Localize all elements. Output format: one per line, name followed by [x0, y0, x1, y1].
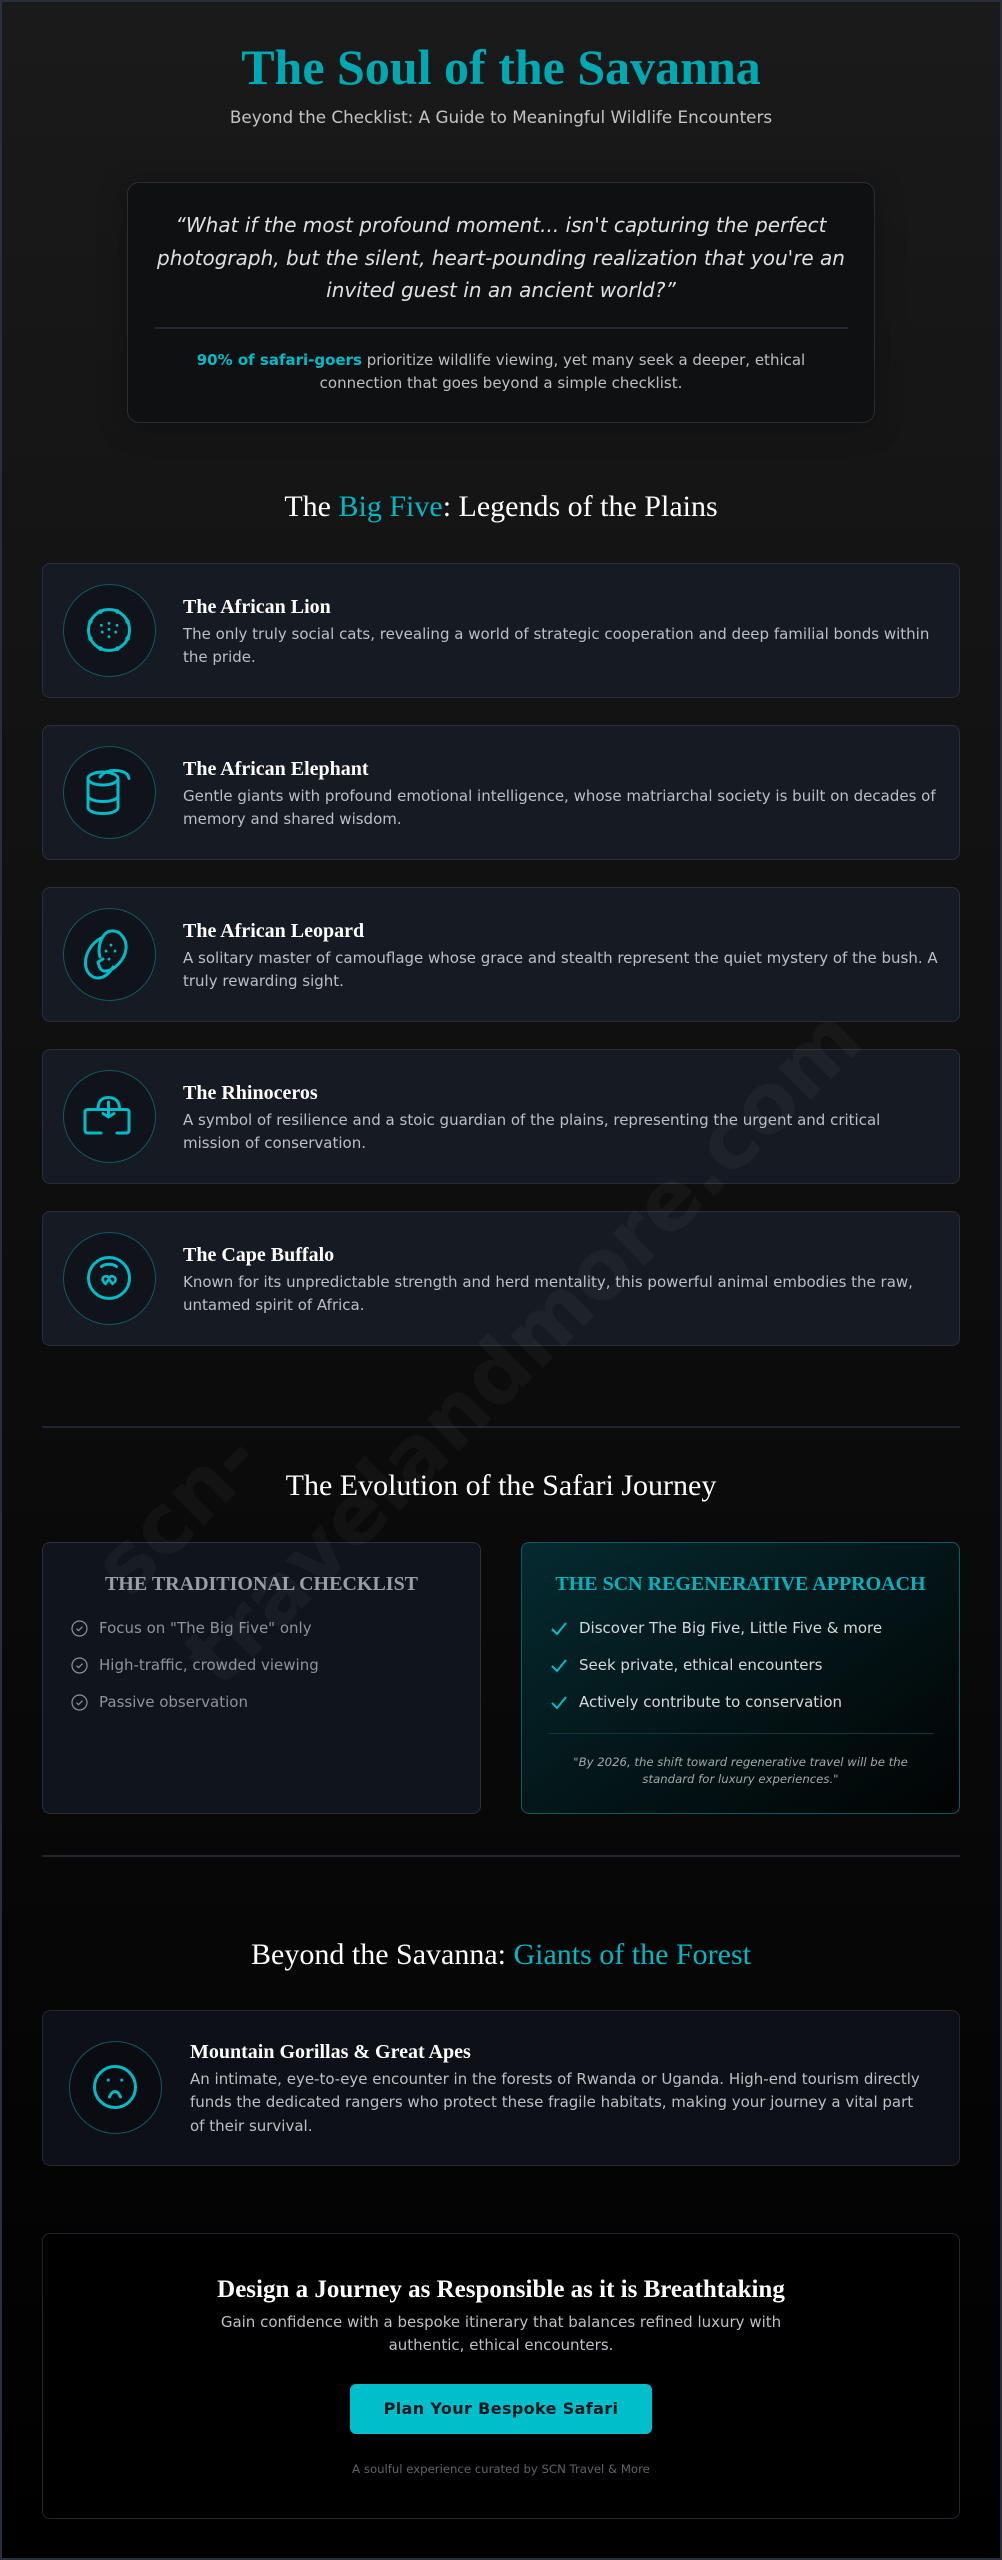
- description: A symbol of resilience and a stoic guardian of the plains, representing the urgent and critical: [183, 1111, 880, 1129]
- description: [183, 949, 938, 990]
- icon: lion: [63, 584, 156, 677]
- name: The African Lion: [183, 596, 331, 618]
- panel: opening quote: [127, 182, 875, 423]
- icon: gorilla: [69, 2041, 162, 2134]
- quote text: invited guest in an ancient world?”: [326, 278, 676, 302]
- forecast note: [573, 1755, 908, 1786]
- description: funds the dedicated rangers who protect these fragile habitats, making your journey a vital part: [190, 2093, 913, 2111]
- description: of their survival.: [190, 2117, 312, 2135]
- name: The African Leopard: [183, 920, 364, 942]
- heading: evolution: The Evolution of the Safari Journey: [286, 1469, 716, 1502]
- list item: Focus on "The Big Five" only: [99, 1619, 312, 1637]
- watermark: scn-: [75, 1410, 279, 1614]
- quote text: [157, 213, 845, 302]
- description: truly rewarding sight.: [183, 972, 344, 990]
- subtitle: Beyond the Checklist: A Guide to Meaningful Wildlife Encounters: [230, 107, 772, 127]
- icon: leopard: [63, 908, 156, 1001]
- list item: Discover The Big Five, Little Five & more: [579, 1619, 882, 1637]
- list item: High-traffic, crowded viewing: [99, 1656, 319, 1674]
- cta heading: Design a Journey as Responsible as it is Breathtaking: [217, 2276, 785, 2303]
- heading: beyond the savanna: Beyond the Savanna: Giants of the Forest: [251, 1938, 751, 1971]
- card: buffalo: [42, 1211, 960, 1346]
- description: memory and shared wisdom.: [183, 810, 402, 828]
- quote text: “What if the most profound moment... isn't capturing the perfect: [176, 213, 826, 237]
- button: [350, 2384, 652, 2434]
- statistic: [197, 351, 805, 392]
- panel: traditional checklist: [42, 1542, 481, 1814]
- icon: elephant: [63, 746, 156, 839]
- icon: rhinoceros: [63, 1070, 156, 1163]
- description: [183, 787, 936, 828]
- card: elephant: [42, 725, 960, 860]
- quote text: photograph, but the silent, heart-pounding realization that you're an: [157, 246, 845, 270]
- description: mission of conservation.: [183, 1134, 366, 1152]
- cta text: Gain confidence with a bespoke itinerary that balances refined luxury with: [221, 2313, 781, 2331]
- description: [183, 1273, 913, 1314]
- title: The Soul of the Savanna: [241, 39, 761, 95]
- panel: call to action: [42, 2233, 960, 2519]
- button: Plan Your Bespoke Safari: [384, 2399, 618, 2418]
- footer credit: A soulful experience curated by SCN Travel & More: [352, 2462, 650, 2476]
- name: The Rhinoceros: [183, 1082, 318, 1104]
- panel heading: THE SCN REGENERATIVE APPROACH: [555, 1573, 926, 1595]
- list item: Seek private, ethical encounters: [579, 1656, 822, 1674]
- cta text: authentic, ethical encounters.: [389, 2336, 613, 2354]
- card: leopard: [42, 887, 960, 1022]
- card: rhinoceros: [42, 1049, 960, 1184]
- panel: regenerative approach: [521, 1542, 960, 1814]
- description: Known for its unpredictable strength and herd mentality, this powerful animal embodies the raw,: [183, 1273, 913, 1291]
- list item: Passive observation: [99, 1693, 248, 1711]
- card: gorillas: [42, 2010, 960, 2166]
- watermark: travelandmore.com: [165, 989, 881, 1705]
- name: Mountain Gorillas & Great Apes: [190, 2041, 471, 2063]
- statistic: connection that goes beyond a simple checklist.: [320, 374, 682, 392]
- description: [182, 625, 929, 666]
- list item: Actively contribute to conservation: [579, 1693, 842, 1711]
- description: Gentle giants with profound emotional intelligence, whose matriarchal society is built on decades of: [183, 787, 936, 805]
- description: The only truly social cats, revealing a world of strategic cooperation and deep familial bonds within: [183, 625, 929, 643]
- forecast note: "By 2026, the shift toward regenerative travel will be the: [573, 1755, 908, 1769]
- description: the pride.: [183, 648, 256, 666]
- card: lion: [42, 563, 960, 698]
- cta text: [221, 2313, 781, 2354]
- name: The Cape Buffalo: [183, 1244, 334, 1266]
- description: untamed spirit of Africa.: [183, 1296, 364, 1314]
- description: An intimate, eye-to-eye encounter in the forests of Rwanda or Uganda. High-end tourism directly: [190, 2070, 920, 2088]
- description: [190, 2070, 920, 2135]
- description: [183, 1111, 880, 1152]
- forecast note: standard for luxury experiences.": [642, 1772, 839, 1786]
- name: The African Elephant: [183, 758, 369, 780]
- panel heading: THE TRADITIONAL CHECKLIST: [105, 1573, 418, 1595]
- icon: buffalo: [63, 1232, 156, 1325]
- statistic: 90% of safari-goers prioritize wildlife viewing, yet many seek a deeper, ethical: [197, 351, 805, 369]
- heading: big five: The Big Five: Legends of the Plains: [284, 490, 718, 523]
- description: A solitary master of camouflage whose grace and stealth represent the quiet mystery of the bush. A: [183, 949, 938, 967]
